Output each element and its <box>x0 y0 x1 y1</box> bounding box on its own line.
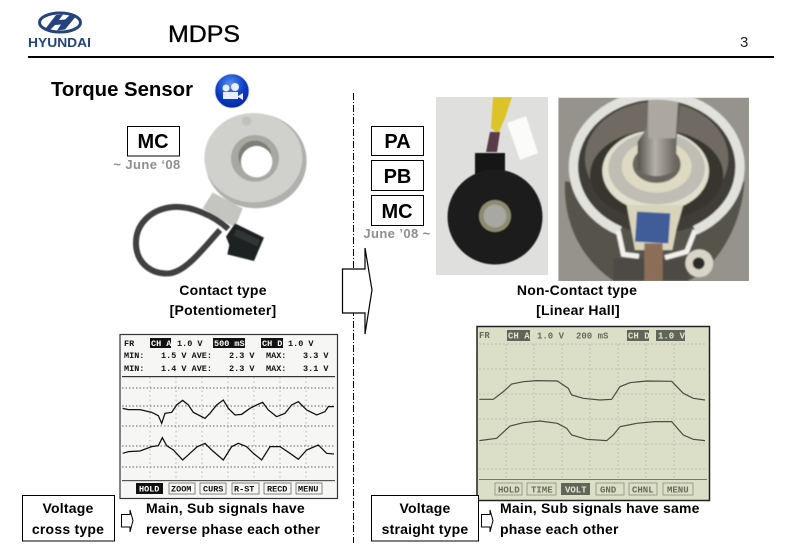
chart: scope trace voltage cross type: CH A <box>151 339 172 349</box>
softkeys: MENU <box>298 484 318 494</box>
title: MDPS <box>168 21 240 48</box>
softkeys: CURS <box>203 484 223 494</box>
softkeys <box>495 483 693 496</box>
text: reverse phase <box>146 500 320 537</box>
label box: voltage straight type: straight type <box>382 521 468 537</box>
text: same phase: phase each other <box>500 521 619 537</box>
chart: scope trace voltage cross type: 2.3 V <box>229 351 255 361</box>
chart: scope trace voltage cross type: 500 mS <box>214 339 245 349</box>
label: PB <box>372 160 424 190</box>
chart: scope trace voltage cross type: 1.0 V <box>177 339 203 349</box>
label box: voltage straight type: Voltage <box>399 500 451 516</box>
softkeys: HOLD <box>139 484 159 494</box>
caption: contact type: Contact type <box>179 282 267 298</box>
page number: 3 <box>740 34 748 51</box>
header rule <box>28 56 774 58</box>
heading: Torque Sensor: Torque Sensor <box>51 78 193 101</box>
caption: contact type: [Potentiometer] <box>170 302 276 318</box>
logo: Hyundai: HYUNDAI <box>28 36 91 50</box>
softkeys: GND <box>600 486 617 496</box>
caption: non-contact type <box>517 282 637 318</box>
chart: scope trace voltage straight type: 200 mS <box>576 332 609 342</box>
arrow: straight type <box>482 510 493 532</box>
icon: video camera button <box>215 74 249 108</box>
softkeys: VOLT <box>565 486 587 496</box>
caption: non-contact type: [Linear Hall] <box>536 302 620 318</box>
softkeys: CHNL <box>632 486 654 496</box>
chart: scope trace voltage cross type: 3.1 V <box>303 364 329 374</box>
date: until June 08: ~ June ‘08 <box>113 157 181 172</box>
chart: scope trace voltage straight type: 1.0 V <box>537 332 565 342</box>
photo: contact type torque sensor <box>136 113 307 273</box>
chart: scope trace voltage straight type: CH D <box>628 332 650 342</box>
chart: scope trace voltage straight type <box>477 326 710 500</box>
chart: scope trace voltage cross type: 1.5 V AVE: <box>161 351 212 361</box>
chart: scope trace voltage cross type: CH D <box>262 339 282 349</box>
label box: voltage cross type: cross type <box>32 521 104 537</box>
softkeys <box>136 483 322 494</box>
chart: scope trace voltage cross type: MIN: <box>124 364 144 374</box>
chart: scope trace voltage straight type: FR <box>479 331 490 341</box>
logo: Hyundai <box>28 13 91 50</box>
softkeys: TIME <box>531 486 553 496</box>
text: same phase <box>500 500 700 537</box>
label: MC left: MC <box>137 131 169 153</box>
signal traces <box>479 381 705 441</box>
softkeys: RECD <box>267 484 287 494</box>
chart: scope trace voltage cross type: 1.4 V AVE: <box>161 364 212 374</box>
chart: scope trace voltage cross type: MAX: <box>266 364 286 374</box>
arrow: contact to non-contact <box>342 248 372 334</box>
chart: scope trace voltage cross type: FR <box>124 339 135 349</box>
softkeys: MENU <box>667 486 689 496</box>
caption: contact type <box>170 282 276 318</box>
signal traces <box>123 400 334 460</box>
label box: voltage straight type <box>372 496 478 541</box>
softkeys: ZOOM <box>171 484 191 494</box>
arrow: cross type <box>122 510 133 532</box>
label: PB: PB <box>384 166 411 188</box>
label: MC right: MC <box>381 201 413 223</box>
caption: non-contact type: Non-Contact type <box>517 282 637 298</box>
date: from June 08: June ’08 ~ <box>363 226 431 241</box>
center dash-dot divider <box>352 93 354 543</box>
chart: scope trace voltage cross type: MAX: <box>266 351 286 361</box>
chart: scope trace voltage cross type: 1.0 V <box>288 339 314 349</box>
label box: voltage cross type: Voltage <box>42 500 94 516</box>
softkeys: HOLD <box>498 486 520 496</box>
photo: non-contact sensor black unit <box>436 97 548 275</box>
chart: scope trace voltage straight type: CH A <box>508 332 530 342</box>
chart: scope trace voltage cross type: MIN: <box>124 351 144 361</box>
photo: non-contact sensor installed on shaft <box>558 95 749 281</box>
chart: scope trace voltage straight type: 1.0 V <box>658 332 686 342</box>
label: MC left <box>128 126 180 156</box>
softkeys: R-ST <box>234 484 254 494</box>
chart: scope trace voltage cross type: 3.3 V <box>303 351 329 361</box>
chart: scope trace voltage cross type <box>120 334 338 498</box>
chart: scope trace voltage cross type: 2.3 V <box>229 364 255 374</box>
label: PA: PA <box>384 131 411 153</box>
text: same phase: Main, Sub signals have same <box>500 500 700 516</box>
text: reverse phase: reverse phase each other <box>146 521 320 537</box>
label box: voltage cross type <box>22 496 114 541</box>
text: reverse phase: Main, Sub signals have <box>146 500 305 516</box>
label: MC right <box>372 196 424 226</box>
label: PA <box>372 126 424 156</box>
